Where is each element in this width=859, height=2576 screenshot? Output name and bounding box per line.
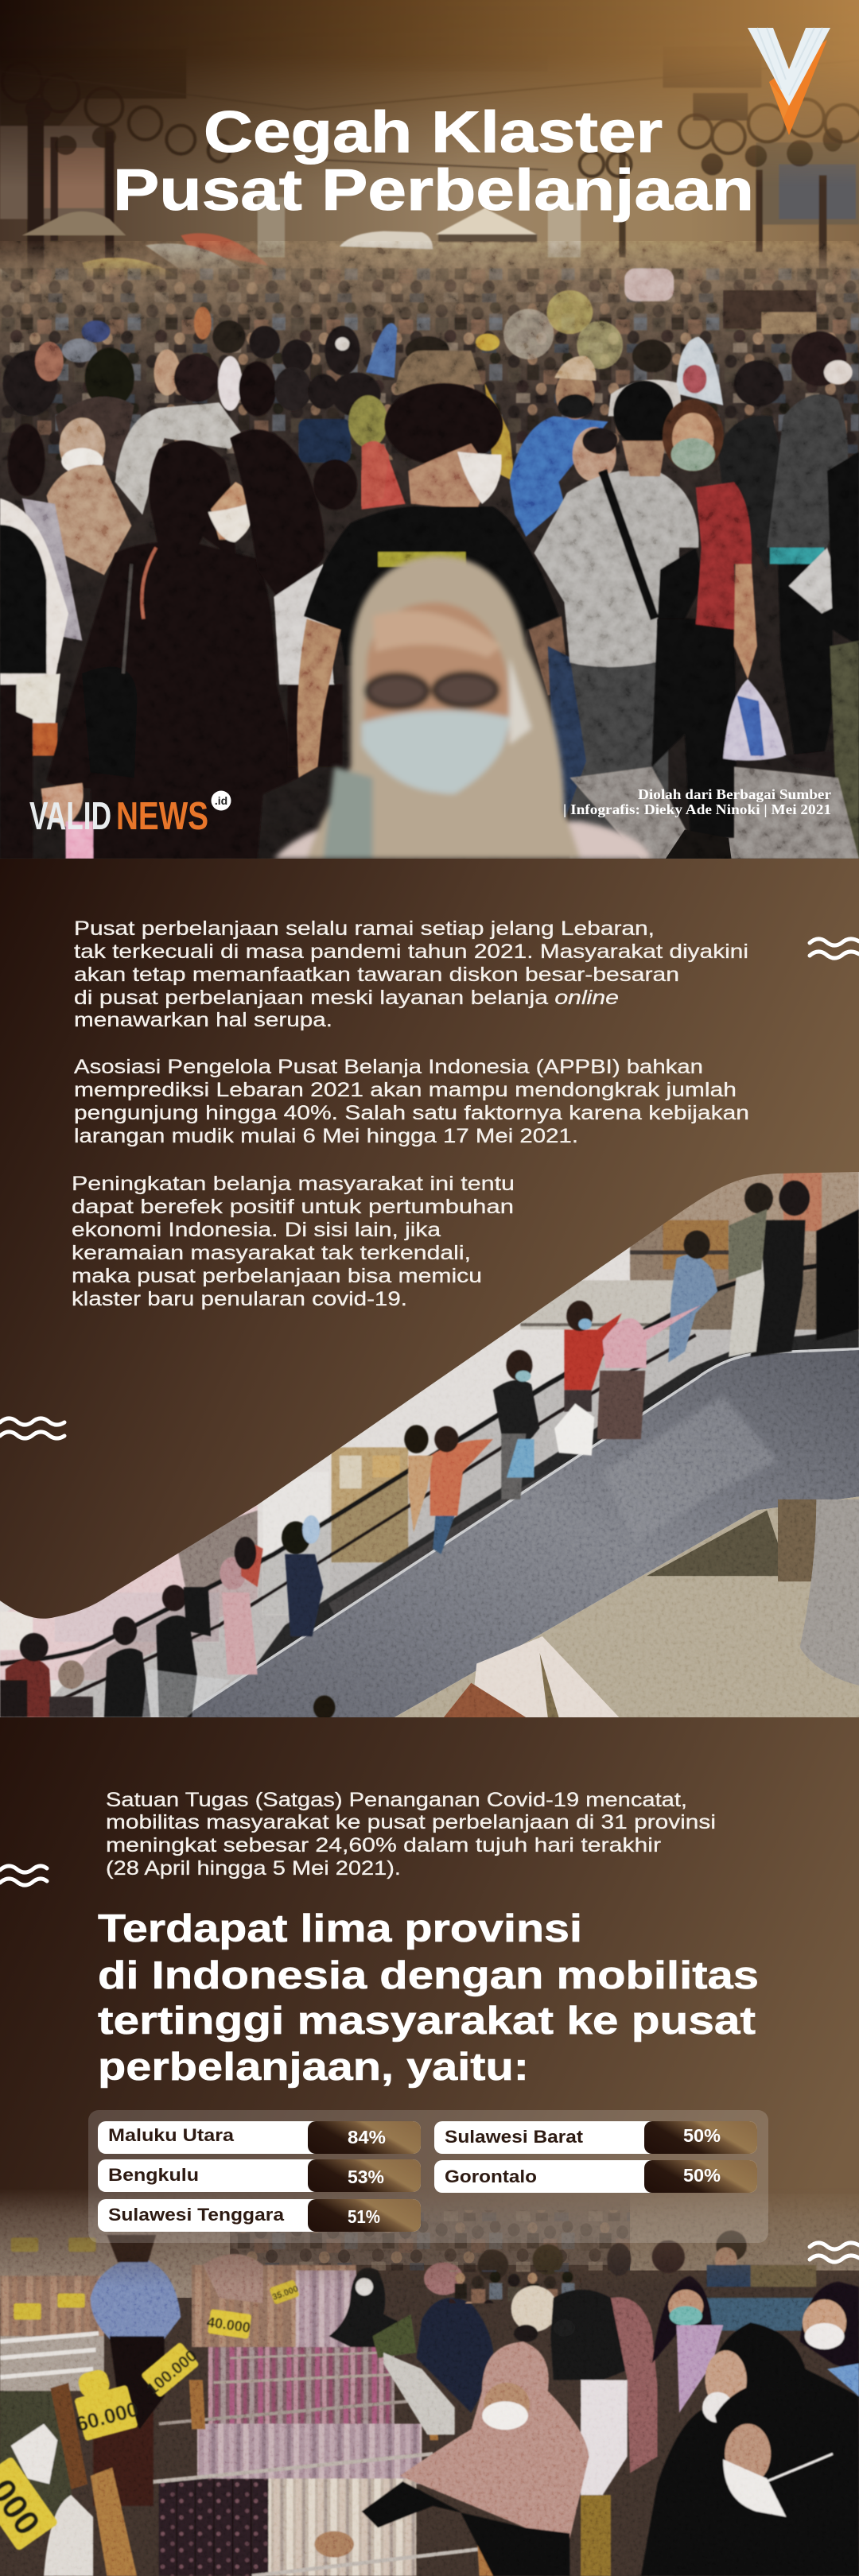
icon: wave middle left — [0, 1418, 64, 1438]
heading: five provinces — [98, 1907, 759, 2089]
row: Maluku Utara 84%: Maluku Utara — [108, 2125, 235, 2145]
heading: five provinces: Terdapat lima provinsi — [98, 1907, 582, 1950]
distant crowd — [2, 269, 853, 641]
title: Pusat Perbelanjaan — [113, 158, 754, 223]
price tags — [0, 2237, 301, 2551]
row: Gorontalo 50% — [434, 2160, 757, 2193]
top gradient wash — [0, 0, 859, 186]
credits — [563, 786, 831, 817]
logo: Validnews — [29, 790, 231, 838]
credits: | Infografis: Dieky Ade Ninoki | Mei 2021 — [563, 801, 831, 817]
text block: paragraph three: maka pusat perbelanjaan bisa memicu — [72, 1265, 482, 1287]
text block: paragraph one: Pusat perbelanjaan selalu ramai setiap jelang Lebaran, — [74, 918, 655, 940]
row: Sulawesi Tenggara 51%: 51% — [348, 2206, 380, 2227]
text block: Satgas paragraph: meningkat sebesar 24,60% dalam tujuh hari terakhir — [106, 1834, 661, 1856]
text block: paragraph three: klaster baru penularan covid-19. — [72, 1288, 407, 1310]
left figures — [0, 499, 68, 859]
woman in red shirt — [652, 399, 786, 838]
panel: clothing store photo — [0, 2155, 859, 2576]
panel: province list — [88, 2110, 768, 2243]
icon: wave left lower — [0, 1866, 47, 1885]
icon: wave right lower — [810, 2243, 859, 2262]
row: Maluku Utara 84% — [98, 2121, 421, 2154]
text block: Satgas paragraph: Satuan Tugas (Satgas) Penanganan Covid-19 mencatat, — [106, 1789, 687, 1811]
pink hijab woman — [400, 2341, 589, 2539]
price tags: 35.000 — [271, 2284, 300, 2302]
text block: paragraph two: memprediksi Lebaran 2021 akan mampu mendongkrak jumlah — [74, 1079, 737, 1101]
heading: five provinces: perbelanjaan, yaitu: — [98, 2046, 529, 2089]
icon: V logo — [748, 28, 830, 135]
text block: paragraph three: Peningkatan belanja masyarakat ini tentu — [72, 1173, 515, 1195]
text block: paragraph one: menawarkan hal serupa. — [74, 1009, 332, 1031]
row: Sulawesi Barat 50%: Sulawesi Barat — [445, 2127, 584, 2147]
text block: Satgas paragraph: (28 April hingga 5 Mei 2021). — [106, 1857, 401, 1880]
credits: Diolah dari Berbagai Sumber — [638, 786, 831, 802]
row: Sulawesi Barat 50% — [434, 2121, 757, 2154]
text block: Satgas paragraph — [106, 1789, 716, 1880]
text block: paragraph three — [72, 1173, 515, 1310]
text block: paragraph three: ekonomi Indonesia. Di sisi lain, jika — [72, 1219, 441, 1241]
text block: paragraph three: dapat berefek positif untuk pertumbuhan — [72, 1196, 514, 1218]
panel: hero crowd photo — [0, 0, 859, 859]
woman in black — [41, 440, 298, 859]
row: Sulawesi Tenggara 51%: Sulawesi Tenggara — [108, 2205, 285, 2225]
people on escalator — [816, 1209, 859, 1340]
price tags: 100.000 — [143, 2346, 200, 2399]
price tags: 40.000 — [206, 2314, 251, 2336]
grey sweater man — [534, 381, 704, 859]
text block: paragraph one: di pusat perbelanjaan meski layanan belanja online — [74, 987, 619, 1009]
blurred foreground woman — [274, 556, 652, 859]
title — [113, 100, 754, 223]
row: Gorontalo 50%: Gorontalo — [445, 2167, 537, 2186]
price tags: 60.000 — [73, 2397, 141, 2436]
row: Bengkulu 53%: 53% — [348, 2167, 384, 2187]
logo: Validnews: VALID — [29, 795, 111, 838]
text block: paragraph two — [74, 1056, 749, 1147]
text block: paragraph two: Asosiasi Pengelola Pusat Belanja Indonesia (APPBI) bahkan — [74, 1056, 703, 1078]
text block: paragraph two: pengunjung hingga 40%. Salah satu faktornya karena kebijakan — [74, 1102, 749, 1124]
text block: paragraph one: tak terkecuali di masa pandemi tahun 2021. Masyarakat diyakini — [74, 941, 748, 963]
umbrellas — [0, 211, 267, 277]
navy hijab shopper — [416, 2298, 494, 2413]
logo: Validnews: NEWS — [116, 795, 208, 838]
blue jacket man — [510, 356, 617, 537]
row: Sulawesi Barat 50%: 50% — [683, 2125, 721, 2146]
pavement — [569, 766, 859, 859]
hijab group — [424, 2262, 464, 2295]
panel: intro background — [0, 859, 859, 1717]
text block: Satgas paragraph: mobilitas masyarakat ke pusat perbelanjaan di 31 provinsi — [106, 1811, 716, 1833]
blue shirt shopper — [91, 2256, 181, 2339]
wooden posts — [91, 2468, 137, 2576]
title: Cegah Klaster — [204, 100, 663, 165]
black hijab centre — [328, 2268, 406, 2347]
text block: paragraph one — [74, 918, 748, 1031]
row: Bengkulu 53% — [98, 2159, 421, 2192]
text block: paragraph one: akan tetap memanfaatkan tawaran diskon besar-besaran — [74, 964, 679, 986]
row: Gorontalo 50%: 50% — [683, 2165, 721, 2186]
panel: closing background — [0, 1717, 859, 2576]
row: Maluku Utara 84%: 84% — [348, 2127, 386, 2147]
glass stair band — [33, 1261, 859, 1717]
clothing racks — [192, 2265, 356, 2347]
row: Sulawesi Tenggara 51% — [98, 2199, 421, 2232]
heading: five provinces: di Indonesia dengan mobilitas — [98, 1954, 759, 1997]
heading: five provinces: tertinggi masyarakat ke pusat — [98, 2000, 756, 2043]
right-side man — [767, 394, 859, 859]
panel: escalator photo — [0, 859, 859, 1720]
logo: Validnews: .id — [215, 794, 227, 807]
icon: wave top right — [810, 939, 859, 958]
long-hair girl — [230, 429, 342, 766]
man in black tee — [297, 383, 569, 778]
row: Bengkulu 53%: Bengkulu — [108, 2165, 199, 2185]
text block: paragraph three: keramaian masyarakat tak terkendali, — [72, 1242, 471, 1264]
text block: paragraph two: larangan mudik mulai 6 Mei hingga 17 Mei 2021. — [74, 1125, 578, 1147]
balustrade and floor — [181, 1348, 859, 1717]
crowd texture — [0, 241, 859, 859]
